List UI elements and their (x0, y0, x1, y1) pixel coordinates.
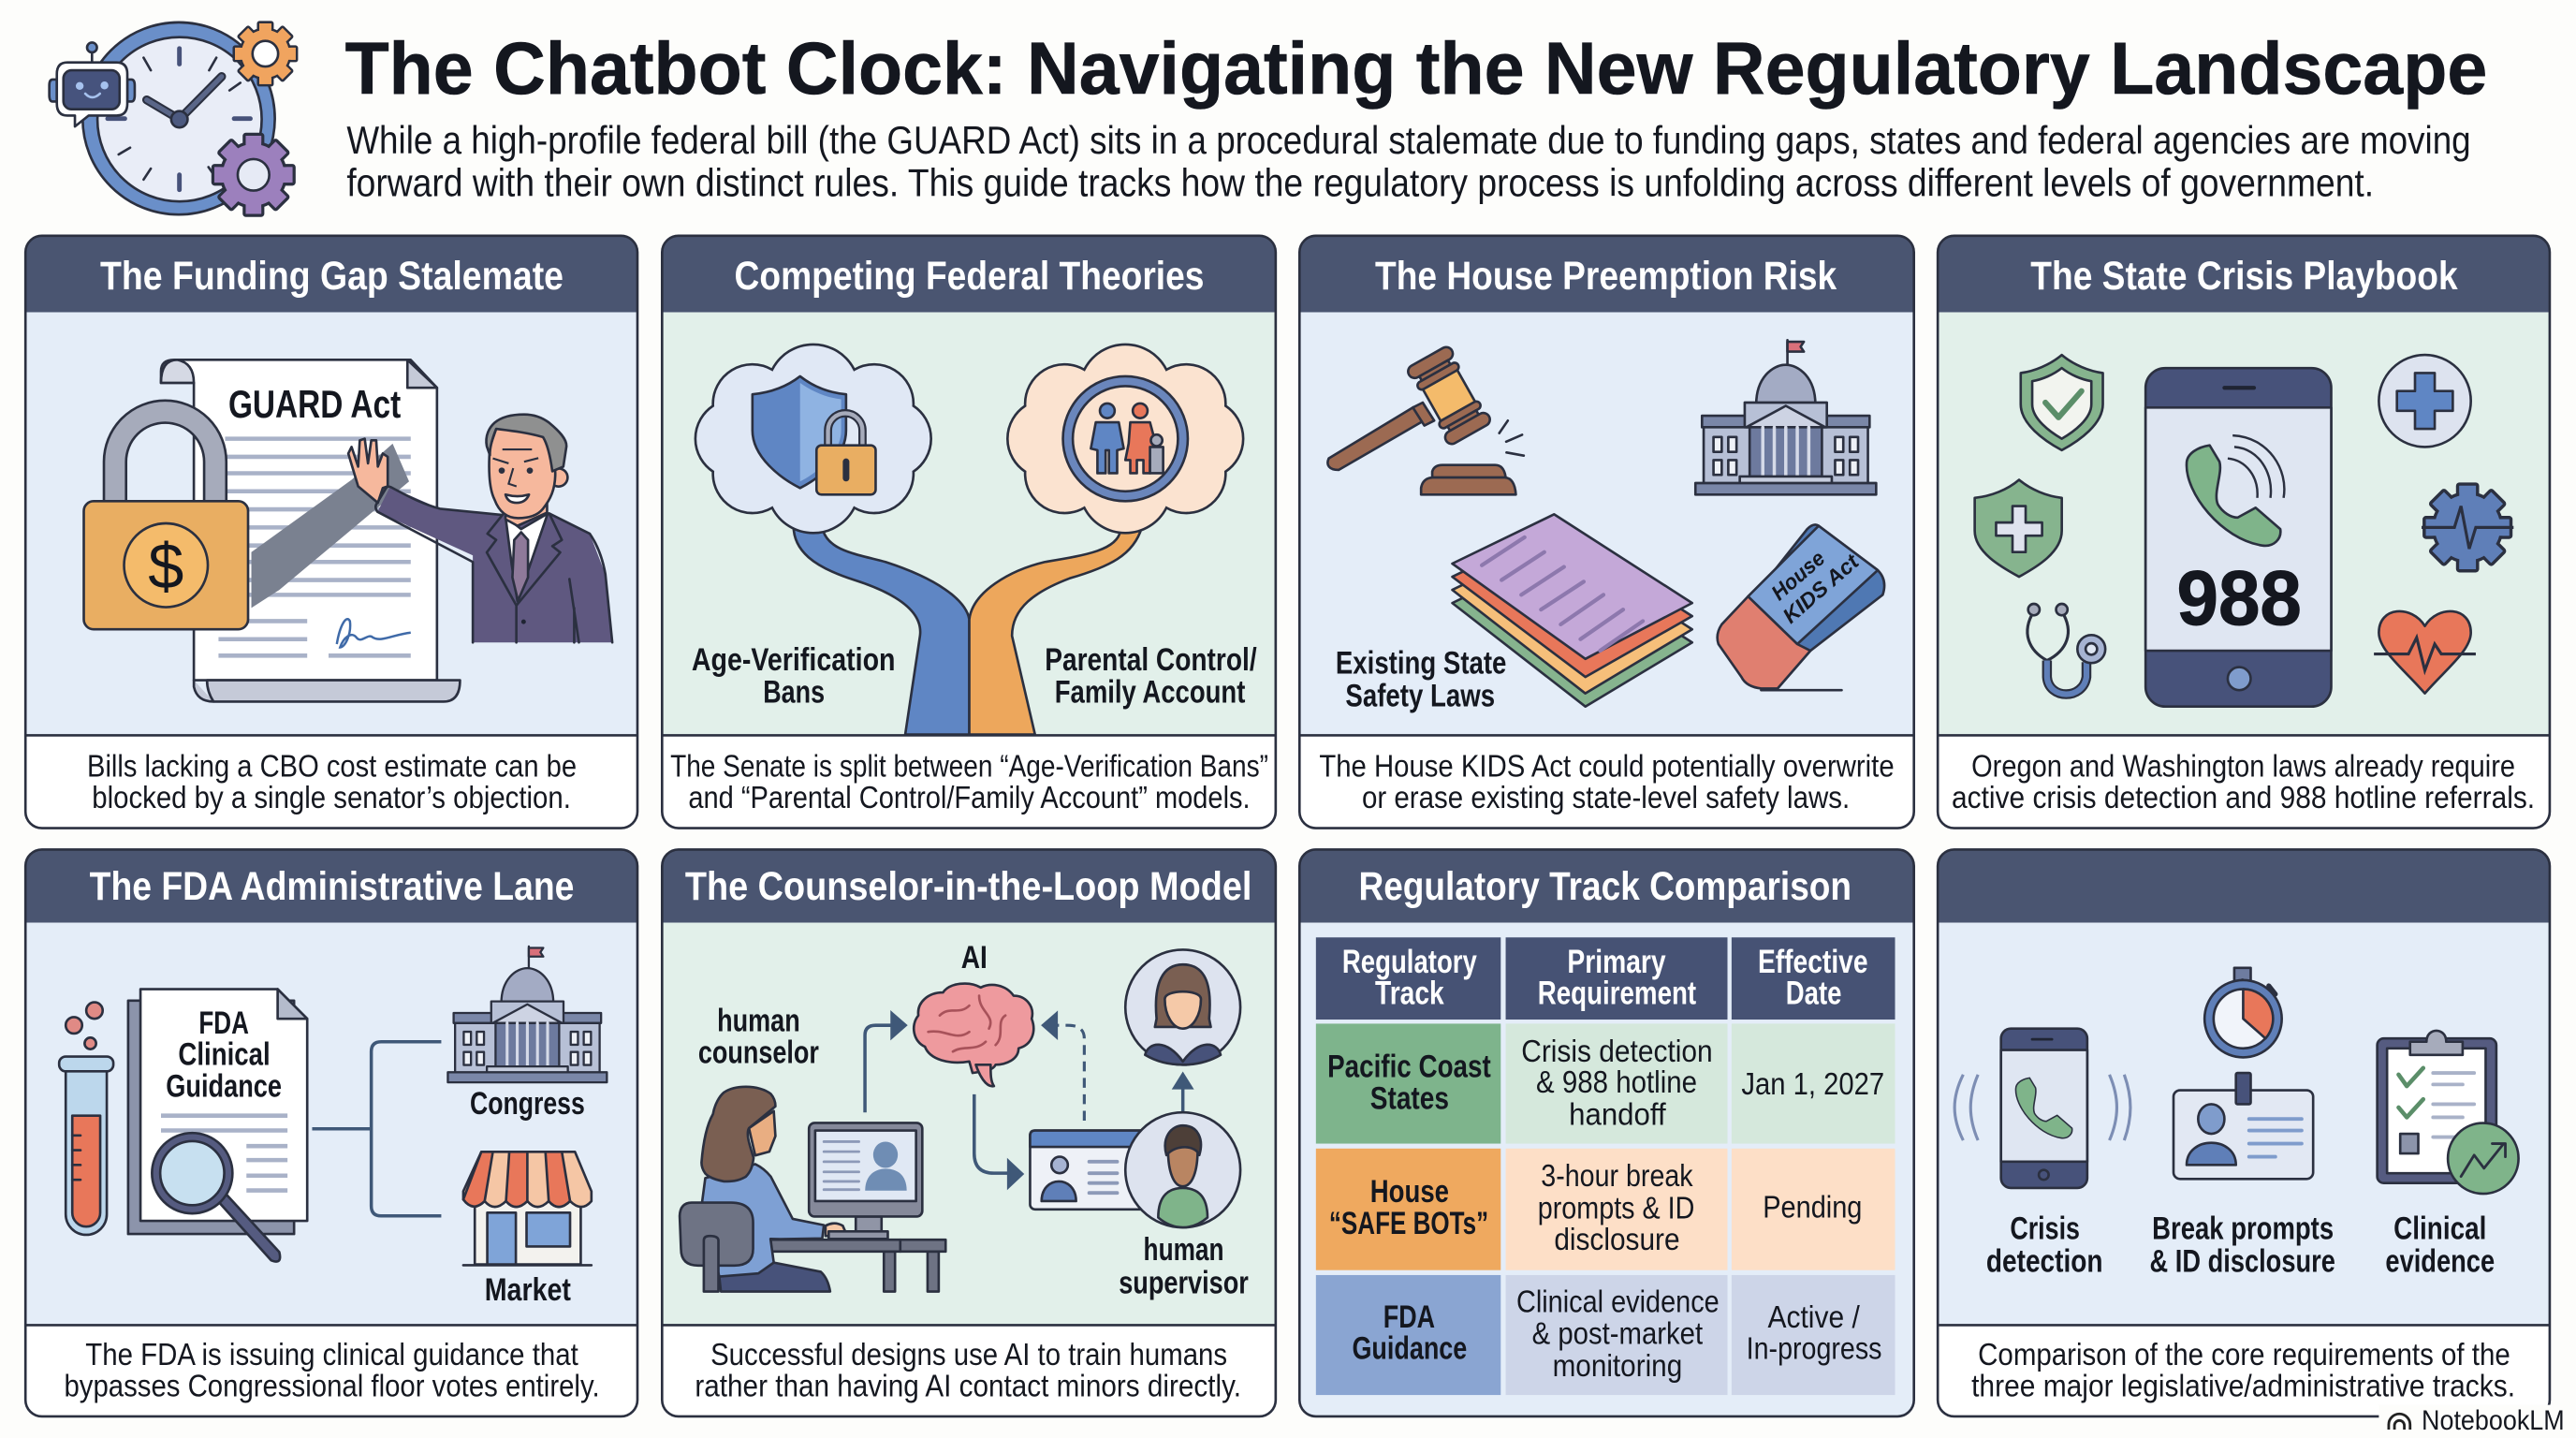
figure: reviewer portrait (1125, 949, 1240, 1064)
caption: The Senate is split between “Age-Verification Bans” (670, 749, 1268, 784)
heading: The Counselor-in-the-Loop Model (685, 864, 1251, 909)
icon: heart with pulse (2374, 611, 2476, 694)
row: Pacific Coast States: Pacific Coast (1327, 1049, 1491, 1084)
figure: senator raising hand (348, 415, 612, 642)
icon: phone crisis detection (1954, 1029, 2130, 1188)
label: crisis detection: detection (1986, 1243, 2103, 1279)
icon: padlock (828, 413, 862, 447)
caption: rather than having AI contact minors directly. (695, 1369, 1241, 1403)
diverging path: orange (970, 527, 1142, 735)
label: parental control: Parental Control/ (1045, 642, 1257, 678)
heading: Competing Federal Theories (735, 254, 1204, 299)
icon: ID badge (2174, 1073, 2313, 1179)
arrow: dashed supervisor to AI (1043, 1014, 1084, 1121)
clock face (82, 22, 275, 214)
caption: Successful designs use AI to train humans (710, 1338, 1227, 1372)
icon: test tube (59, 1003, 113, 1235)
label: human supervisor (1119, 1232, 1249, 1300)
illustration: GUARD Act scroll (161, 360, 460, 701)
label: human counselor (698, 1003, 819, 1071)
caption: three major legislative/administrative tracks. (1971, 1369, 2515, 1403)
watermark: NotebookLM: NotebookLM (2422, 1405, 2565, 1436)
row: Pacific Coast States: & 988 hotline (1536, 1065, 1697, 1100)
panel: Regulatory Track Comparison (1299, 849, 1914, 1416)
label: clinical evidence: evidence (2385, 1243, 2495, 1279)
caption (1971, 1338, 2515, 1403)
caption: and “Parental Control/Family Account” models. (688, 781, 1251, 815)
caption: or erase existing state-level safety laws. (1362, 781, 1850, 815)
heading: The Funding Gap Stalemate (100, 254, 564, 299)
panel: The Counselor-in-the-Loop Model (662, 849, 1276, 1416)
row: FDA Guidance: FDA (1383, 1299, 1435, 1335)
label: clinical evidence (2385, 1211, 2495, 1279)
row: FDA Guidance: In-progress (1747, 1331, 1881, 1366)
row: Pacific Coast States: States (1370, 1081, 1449, 1117)
subtitle (346, 119, 2471, 205)
icon: clock with robot and gears (50, 22, 297, 215)
table header: Primary (1567, 944, 1666, 980)
row: Pacific Coast States (1316, 1023, 1895, 1144)
row: House SAFE BOTs: House (1370, 1174, 1449, 1210)
table header: Effective (1758, 944, 1868, 980)
purple gear (212, 134, 294, 215)
row: FDA Guidance: & post-market (1532, 1317, 1704, 1352)
panel: The FDA Administrative Lane (25, 849, 637, 1416)
caption (1952, 749, 2535, 815)
document: FDA clinical guidance: Guidance (166, 1069, 282, 1105)
table header: Date (1786, 975, 1841, 1011)
panel: The House Preemption Risk (1299, 236, 1914, 829)
icon: capitol building (1695, 340, 1876, 494)
icon: family (1090, 404, 1164, 473)
orange gear (234, 22, 297, 85)
caption: The House KIDS Act could potentially overwrite (1319, 749, 1895, 784)
row: Pacific Coast States: handoff (1569, 1097, 1666, 1132)
caption: bypasses Congressional floor votes entirely. (64, 1369, 600, 1403)
label: break prompts and ID disclosure: & ID disclosure (2150, 1243, 2335, 1279)
icon: House KIDS Act eraser: KIDS Act (1778, 549, 1865, 628)
row: FDA Guidance: Active / (1767, 1300, 1860, 1335)
arrow: AI to screen (974, 1094, 1022, 1186)
label: human supervisor: human (1144, 1232, 1224, 1268)
panel: The Funding Gap Stalemate (25, 236, 637, 829)
heading: The State Crisis Playbook (2030, 254, 2458, 299)
label: break prompts and ID disclosure (2150, 1211, 2335, 1279)
heading: Regulatory Track Comparison (1358, 864, 1852, 909)
icon: Congress building (447, 946, 607, 1082)
panel: The State Crisis Playbook (1938, 236, 2550, 829)
label: human counselor: counselor (698, 1035, 819, 1071)
icon: shield plus (1975, 479, 2062, 577)
icon: family ring (1063, 376, 1188, 501)
row: House SAFE BOTs: prompts & ID (1538, 1191, 1694, 1225)
icon: medical plus circle (2378, 355, 2471, 447)
caption (87, 749, 577, 815)
thought cloud: family account (1007, 345, 1243, 533)
icon: profile window (1030, 1131, 1149, 1210)
caption (1319, 749, 1895, 815)
icon: gear with pulse (2422, 484, 2513, 571)
icon: magnifying glass (152, 1133, 280, 1262)
figure: counselor at computer (680, 1087, 945, 1292)
icon: brain (914, 984, 1033, 1086)
thought cloud: age verification (695, 345, 931, 533)
caption (64, 1338, 600, 1403)
connector lines (312, 1042, 441, 1216)
subtitle: forward with their own distinct rules. This guide tracks how the regulatory process is unfolding across different levels of government. (346, 162, 2374, 205)
title: The Chatbot Clock: Navigating the New Regulatory Landscape (345, 27, 2487, 110)
label: clinical evidence: Clinical (2393, 1211, 2486, 1246)
row: Pacific Coast States: Jan 1, 2027 (1741, 1067, 1884, 1102)
icon: stack of state laws (1453, 514, 1692, 707)
table header: Regulatory (1342, 944, 1477, 980)
row: House SAFE BOTs: “SAFE BOTs” (1329, 1206, 1488, 1241)
phone receiver (2187, 446, 2280, 546)
label: existing state safety laws: Existing State (1336, 646, 1506, 682)
panel: Competing Federal Theories (662, 236, 1276, 829)
caption: The FDA is issuing clinical guidance that (85, 1338, 578, 1372)
table header (1316, 937, 1895, 1020)
row: House SAFE BOTs: Pending (1763, 1191, 1862, 1225)
icon: padlock with dollar: $ (148, 530, 183, 602)
heading: The FDA Administrative Lane (90, 864, 574, 909)
label: human counselor: human (717, 1003, 800, 1038)
table header: Requirement (1538, 975, 1696, 1011)
label: crisis detection (1986, 1211, 2103, 1279)
panel: core requirements icons (1938, 849, 2550, 1416)
table header: Track (1375, 975, 1444, 1011)
icon: clipboard with trend (2378, 1031, 2519, 1194)
icon: gavel (1327, 345, 1524, 494)
robot (50, 42, 135, 126)
label: parental control: Family Account (1055, 674, 1245, 710)
row: House SAFE BOTs: disclosure (1554, 1223, 1680, 1257)
figure: human supervisor portrait (1125, 1112, 1240, 1227)
icon: padlock with dollar (84, 412, 248, 629)
row: Pacific Coast States: Crisis detection (1521, 1034, 1713, 1069)
document: FDA clinical guidance: Clinical (178, 1036, 271, 1072)
document: FDA clinical guidance (128, 990, 307, 1234)
icon: shield (753, 376, 846, 488)
label: AI: AI (961, 940, 988, 976)
caption: Bills lacking a CBO cost estimate can be (87, 749, 577, 784)
arrow: counselor to AI (865, 1014, 905, 1112)
row: House SAFE BOTs (1316, 1149, 1895, 1270)
label: age verification (692, 642, 896, 710)
row: FDA Guidance: Clinical evidence (1516, 1284, 1720, 1319)
label: crisis detection: Crisis (2010, 1211, 2080, 1246)
illustration: GUARD Act scroll: GUARD Act (228, 382, 401, 426)
label: existing state safety laws (1336, 646, 1506, 714)
diverging path: blue (794, 526, 970, 735)
label: parental control (1045, 642, 1257, 710)
caption: blocked by a single senator’s objection. (92, 781, 571, 815)
icon: phone with 988 (2145, 368, 2331, 707)
icon: stopwatch (2204, 968, 2282, 1057)
heading: The House Preemption Risk (1375, 254, 1837, 299)
label: existing state safety laws: Safety Laws (1345, 679, 1495, 714)
row: FDA Guidance: Guidance (1352, 1330, 1467, 1366)
caption: Comparison of the core requirements of the (1978, 1338, 2510, 1372)
caption (670, 749, 1268, 815)
row: FDA Guidance: monitoring (1553, 1349, 1682, 1384)
icon: stethoscope (2027, 604, 2105, 695)
comparison table (1316, 937, 1895, 1395)
label: human supervisor: supervisor (1119, 1265, 1249, 1300)
icon: House KIDS Act eraser: House (1766, 546, 1830, 605)
icon: phone with 988: 988 (2177, 555, 2302, 641)
arrow: up to reviewer (1175, 1075, 1191, 1112)
label: break prompts and ID disclosure: Break prompts (2152, 1211, 2334, 1246)
icon: House KIDS Act eraser (1718, 524, 1884, 690)
row: House SAFE BOTs: 3-hour break (1541, 1159, 1693, 1194)
icon: shield check (2021, 355, 2103, 450)
label: age verification: Age-Verification (692, 642, 896, 678)
label: Congress: Congress (470, 1086, 585, 1122)
caption (695, 1338, 1241, 1403)
label: Market: Market (485, 1272, 571, 1308)
icon: market storefront (463, 1152, 592, 1265)
document: FDA clinical guidance: FDA (198, 1005, 249, 1041)
label: age verification: Bans (763, 674, 825, 710)
row: FDA Guidance (1316, 1275, 1895, 1395)
